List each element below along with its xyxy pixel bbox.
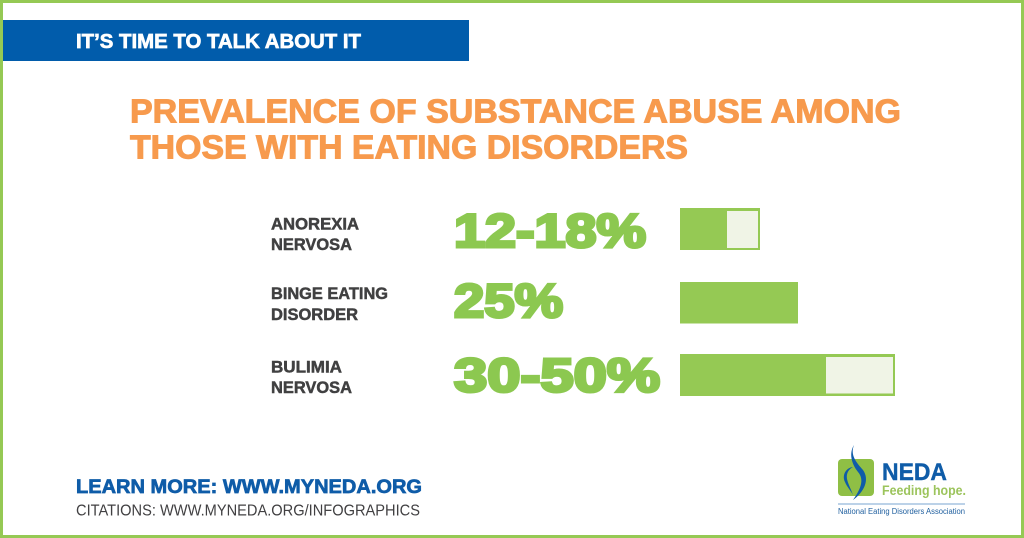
- wordmark: NEDA: NEDA: [882, 459, 947, 486]
- label: bulimia nervosa: [271, 358, 352, 397]
- label: binge eating disorder: BINGE EATING: [271, 284, 388, 303]
- row: anorexia nervosa: [271, 204, 760, 257]
- bar: binge eating disorder: [680, 282, 798, 324]
- label: anorexia nervosa: [271, 214, 359, 254]
- row: bulimia nervosa: [271, 348, 895, 402]
- learn more link: LEARN MORE: WWW.MYNEDA.ORG: [76, 476, 422, 498]
- label: binge eating disorder: [271, 284, 388, 324]
- value: 25%: 25%: [454, 274, 563, 327]
- value: 12-18%: 12-18%: [454, 204, 646, 257]
- banner: IT’S TIME TO TALK ABOUT IT: [76, 31, 361, 53]
- label: anorexia nervosa: NERVOSA: [271, 235, 352, 254]
- organization name: National Eating Disorders Association: [838, 507, 965, 516]
- label: anorexia nervosa: ANOREXIA: [271, 214, 359, 234]
- label: bulimia nervosa: NERVOSA: [271, 378, 352, 397]
- bar: anorexia nervosa: [680, 208, 760, 250]
- label: binge eating disorder: DISORDER: [271, 305, 358, 324]
- tagline: Feeding hope.: Feeding hope.: [882, 482, 966, 498]
- label: bulimia nervosa: BULIMIA: [271, 358, 342, 376]
- citations: CITATIONS: WWW.MYNEDA.ORG/INFOGRAPHICS: [76, 502, 420, 520]
- title: [130, 92, 901, 166]
- NEDA logo: [838, 445, 966, 516]
- value: 30-50%: 30-50%: [454, 348, 660, 402]
- title: THOSE WITH EATING DISORDERS: [130, 128, 688, 166]
- title: PREVALENCE OF SUBSTANCE ABUSE AMONG: [130, 92, 901, 130]
- banner: [3, 20, 469, 61]
- row: binge eating disorder: [271, 274, 798, 327]
- bar: bulimia nervosa: [680, 354, 895, 396]
- icon: NEDA emblem: [838, 445, 874, 500]
